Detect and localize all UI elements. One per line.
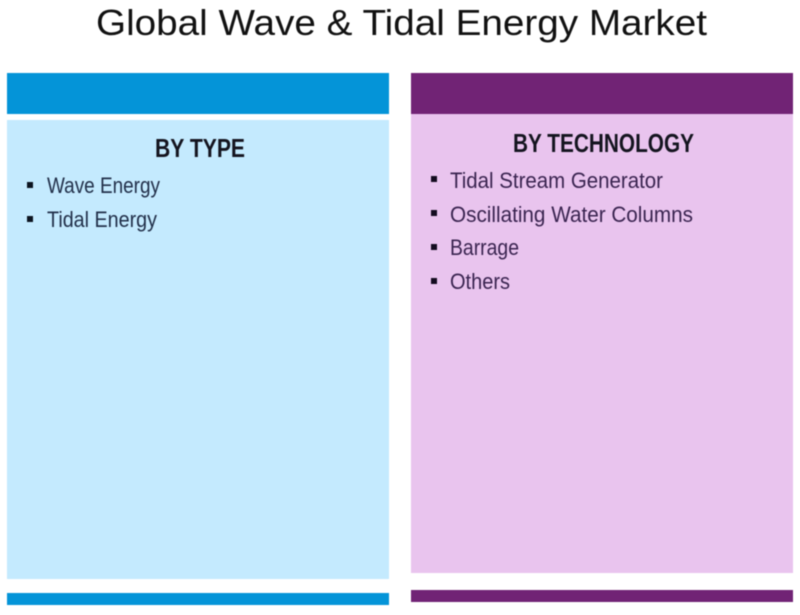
bullet	[27, 182, 33, 188]
item: tidal stream generator: Tidal Stream Generator	[450, 168, 663, 193]
bullet	[431, 278, 437, 284]
title: Global Wave & Tidal Energy Market	[96, 2, 707, 43]
item: barrage: Barrage	[450, 235, 519, 260]
bullet	[431, 210, 437, 216]
item: others: Others	[450, 269, 510, 294]
bullet	[431, 176, 437, 182]
panel footer bar: purple	[411, 590, 793, 602]
heading: by type: BY TYPE	[155, 133, 245, 163]
panel header bar: blue	[7, 73, 389, 114]
list: type items	[27, 173, 160, 232]
panel: by type	[7, 73, 389, 605]
panel body: light purple	[411, 114, 793, 573]
panel: by technology	[411, 73, 793, 602]
panel body: light blue	[7, 120, 389, 579]
bullet	[431, 244, 437, 250]
heading: by technology: BY TECHNOLOGY	[513, 128, 694, 158]
panel footer bar: blue	[7, 593, 389, 605]
item: wave energy: Wave Energy	[47, 173, 160, 198]
panel header bar: purple	[411, 73, 793, 114]
bullet	[27, 216, 33, 222]
list: technology items	[431, 168, 693, 294]
item: oscillating water columns: Oscillating Water Columns	[450, 202, 693, 227]
item: tidal energy: Tidal Energy	[47, 207, 157, 232]
